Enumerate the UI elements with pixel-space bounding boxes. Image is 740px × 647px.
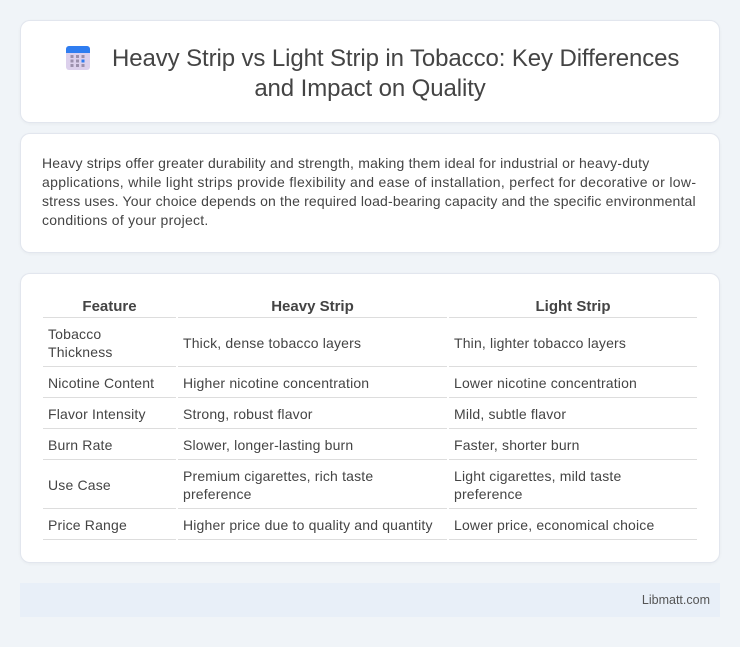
cell: heavy flavor: Strong, robust flavor [183, 406, 313, 422]
row label: Flavor Intensity: Flavor Intensity [48, 406, 146, 422]
row label: Tobacco Thickness [48, 326, 113, 360]
summary line 1: Heavy strips offer greater durability and strength, making them ideal for industrial or heavy-duty [42, 155, 649, 171]
row label: Use Case: Use Case [48, 477, 111, 493]
panel: title card [20, 20, 720, 123]
panel: summary text [20, 133, 720, 253]
row label: Tobacco Thickness: Thickness [48, 344, 113, 360]
table header: Heavy Strip: Heavy Strip [271, 298, 354, 315]
row label: Nicotine Content: Nicotine Content [48, 375, 154, 391]
footer credit: Libmatt.com [642, 593, 710, 607]
cell: light use case: preference [454, 486, 523, 502]
cell: heavy thickness: Thick, dense tobacco layers [183, 335, 361, 351]
title line 2: and Impact on Quality [254, 75, 486, 102]
row label: Burn Rate: Burn Rate [48, 437, 113, 453]
cell: heavy nicotine: Higher nicotine concentration [183, 375, 369, 391]
cell: light flavor: Mild, subtle flavor [454, 406, 566, 422]
cell: heavy use case: preference [183, 486, 252, 502]
cell: light price: Lower price, economical choice [454, 517, 654, 533]
row label: Tobacco Thickness: Tobacco [48, 326, 101, 342]
cell: heavy use case [183, 468, 373, 502]
cell: light burn: Faster, shorter burn [454, 437, 580, 453]
cell: heavy price: Higher price due to quality and quantity [183, 517, 433, 533]
panel: comparison table [20, 273, 720, 563]
title line 1: Heavy Strip vs Light Strip in Tobacco: Key Differences [112, 45, 679, 72]
cell: heavy use case: Premium cigarettes, rich taste [183, 468, 373, 484]
cell: light thickness: Thin, lighter tobacco layers [454, 335, 626, 351]
cell: light use case [454, 468, 621, 502]
summary line 3: stress uses. Your choice depends on the required load-bearing capacity and the specific environmental [42, 193, 696, 209]
summary line 2: applications, while light strips provide flexibility and ease of installation, perfect for decorative or low- [42, 174, 696, 190]
summary line 4: conditions of your project. [42, 212, 209, 228]
cell: light nicotine: Lower nicotine concentration [454, 375, 637, 391]
table header: Light Strip: Light Strip [536, 298, 610, 315]
row label: Price Range: Price Range [48, 517, 127, 533]
icon: calendar [66, 46, 90, 70]
footer bar [20, 583, 720, 617]
cell: light use case: Light cigarettes, mild taste [454, 468, 621, 484]
cell: heavy burn: Slower, longer-lasting burn [183, 437, 353, 453]
table header: Feature: Feature [82, 298, 137, 315]
